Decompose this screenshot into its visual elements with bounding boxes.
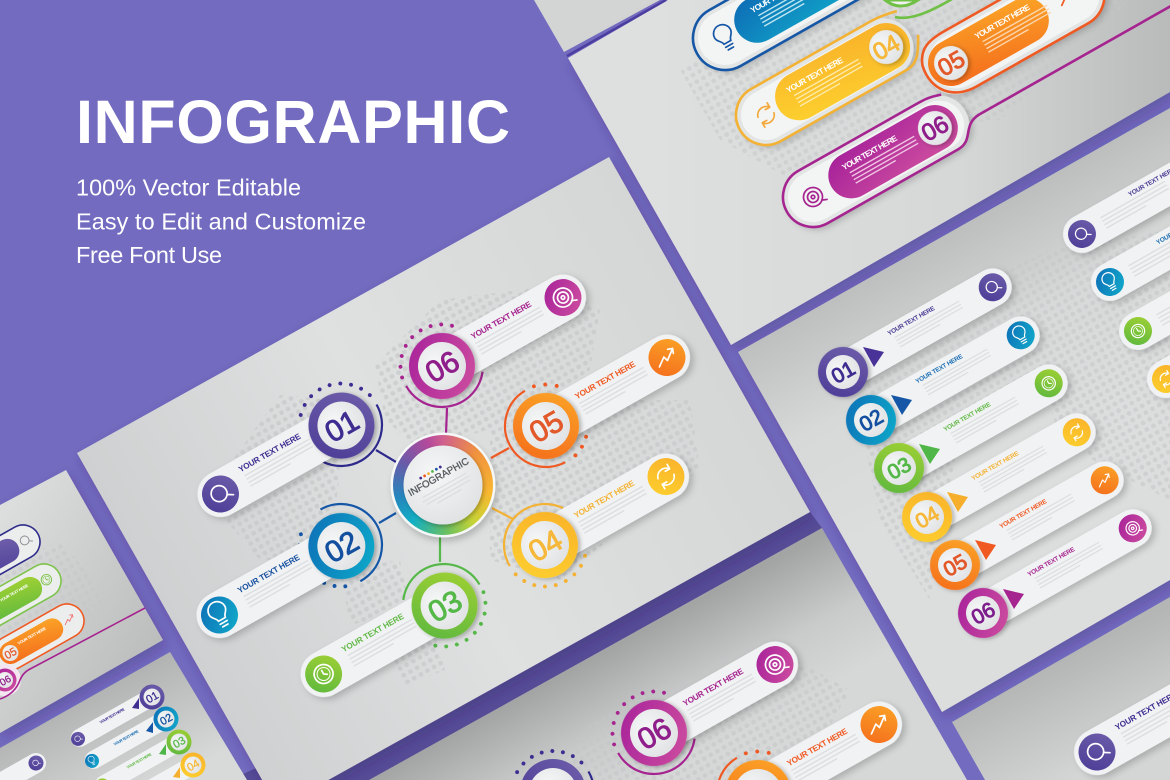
capsule 06 mini with line [0,608,145,699]
title block [76,88,510,268]
item 05: YOUR TEXT HERE [573,360,638,401]
capsule 05 [911,0,1116,106]
list row 03 [865,352,1078,502]
item 06: YOUR TEXT HERE [469,300,534,341]
capsule 04 [725,4,930,156]
list row 05 [921,449,1134,599]
subtitle line 1: 100% Vector Editable [76,174,301,200]
item 02 [183,501,386,655]
mini row 04: 04 [185,758,202,774]
panel: upper left slide with capsules [0,470,163,733]
list row 04: YOUR TEXT HERE [971,450,1021,482]
capsule 04: YOUR TEXT HERE [785,55,845,95]
second list pill 1 [1056,128,1170,260]
panel: lower right slide [952,597,1170,780]
divider line at top edge [567,0,666,56]
dotted world map right [860,230,1170,600]
list row 02: 02 [856,405,887,437]
shaded band under main slide [230,512,822,780]
second list pill 3 [1112,225,1170,357]
list row 02: YOUR TEXT HERE [915,353,965,385]
capsule 05: 05 [933,46,970,82]
pill 05 [713,685,915,780]
capsule 04: 04 [868,30,905,66]
list row 06 [949,497,1162,647]
capsule 06 with long line [772,0,1170,238]
panel: right slide with list [738,108,1170,712]
node 01 partial [497,736,609,780]
pill 05: YOUR TEXT HERE [785,727,850,768]
list row 05: YOUR TEXT HERE [999,498,1049,530]
list row 01 [809,256,1022,406]
arcs and dots node 03 [392,553,496,657]
capsule 05 mini: 05 [3,646,19,662]
subtitle line 2: Easy to Edit and Customize [76,208,366,234]
list row 06: 06 [968,598,999,630]
dotted world map bottom [560,640,850,780]
list row 06: YOUR TEXT HERE [1027,546,1077,578]
node 05 partial [703,738,813,780]
mini row 04 [104,748,210,780]
center hub: INFOGRAPHIC [407,456,471,499]
item 03: 03 [423,584,468,629]
mini row 01: 01 [144,690,161,706]
capsule 01 mini [0,519,46,599]
center hub [390,432,496,538]
arcs and dots node 04 [489,489,601,601]
item 06: 06 [420,345,465,390]
item 05: 05 [524,405,569,450]
list row 04 [893,401,1106,551]
subtitle line 3: Free Font Use [76,242,222,268]
capsule 03 mini [0,558,67,638]
item 03 [287,561,490,714]
pill with magnifier icon [1066,645,1170,780]
mini row 01: YOUR TEXT HERE [99,707,126,725]
list row 03: 03 [884,453,915,485]
item 04: 04 [523,524,568,569]
arcs and dots node 02 [285,489,397,601]
dotted map left [0,540,110,690]
mini row 03: YOUR TEXT HERE [126,752,153,770]
item 06 [397,258,599,411]
mini pill left column [0,749,50,780]
item 01: YOUR TEXT HERE [237,432,303,474]
item 04 [500,437,702,590]
second list pill 2 [1084,176,1170,308]
item 04: YOUR TEXT HERE [572,479,637,520]
mini row 02: YOUR TEXT HERE [113,729,140,747]
list row 05: 05 [940,550,971,582]
capsule 06 with long line: 06 [917,111,954,147]
capsule 05 mini [0,598,90,676]
capsule 02 [681,0,927,82]
list row 01: YOUR TEXT HERE [887,305,937,337]
capsule 05 mini: YOUR TEXT HERE [17,626,47,646]
item 02: YOUR TEXT HERE [236,553,302,595]
capsule 03 fragment [885,0,952,18]
panel: main slide with radial diagram [77,157,810,780]
node 06: 06 [632,712,677,757]
dotted world map top [680,0,1130,190]
list row 04: 04 [912,502,944,534]
panel: top slide with capsules [567,0,1170,345]
second list pill 4 [1140,273,1170,405]
list row 02 [837,304,1050,454]
item 02: 02 [319,525,365,570]
connector lines [376,408,513,562]
mini row 02 [80,702,183,775]
mini row 03: 03 [171,735,188,751]
mini row 02: 02 [158,712,175,728]
node 06: YOUR TEXT HERE [681,667,746,708]
list row 01: 01 [828,357,859,389]
item 03: YOUR TEXT HERE [340,612,406,654]
arcs and dots node 05 [491,371,601,481]
node 06 [603,625,811,780]
capsule 06 with long line: YOUR TEXT HERE [840,133,899,172]
dotted world map main [225,285,700,685]
mini row 03 [90,725,196,780]
mini row 01 [66,680,169,753]
panel: upper sliver slide [534,0,660,52]
item 01 [184,381,386,534]
panel: lower left slide with mini list [0,652,247,780]
capsule 05: YOUR TEXT HERE [973,2,1032,41]
heading: INFOGRAPHIC [76,88,510,156]
mini triangles [132,698,180,778]
list row 03: YOUR TEXT HERE [943,401,993,433]
arcs and dots node 06 [391,315,493,417]
arcs and dots node 01 [285,369,397,481]
item 01: 01 [320,404,365,449]
panel: bottom slide with second radial diagram [369,528,967,780]
item 05 [501,318,703,471]
list arrow triangles [863,347,1024,609]
